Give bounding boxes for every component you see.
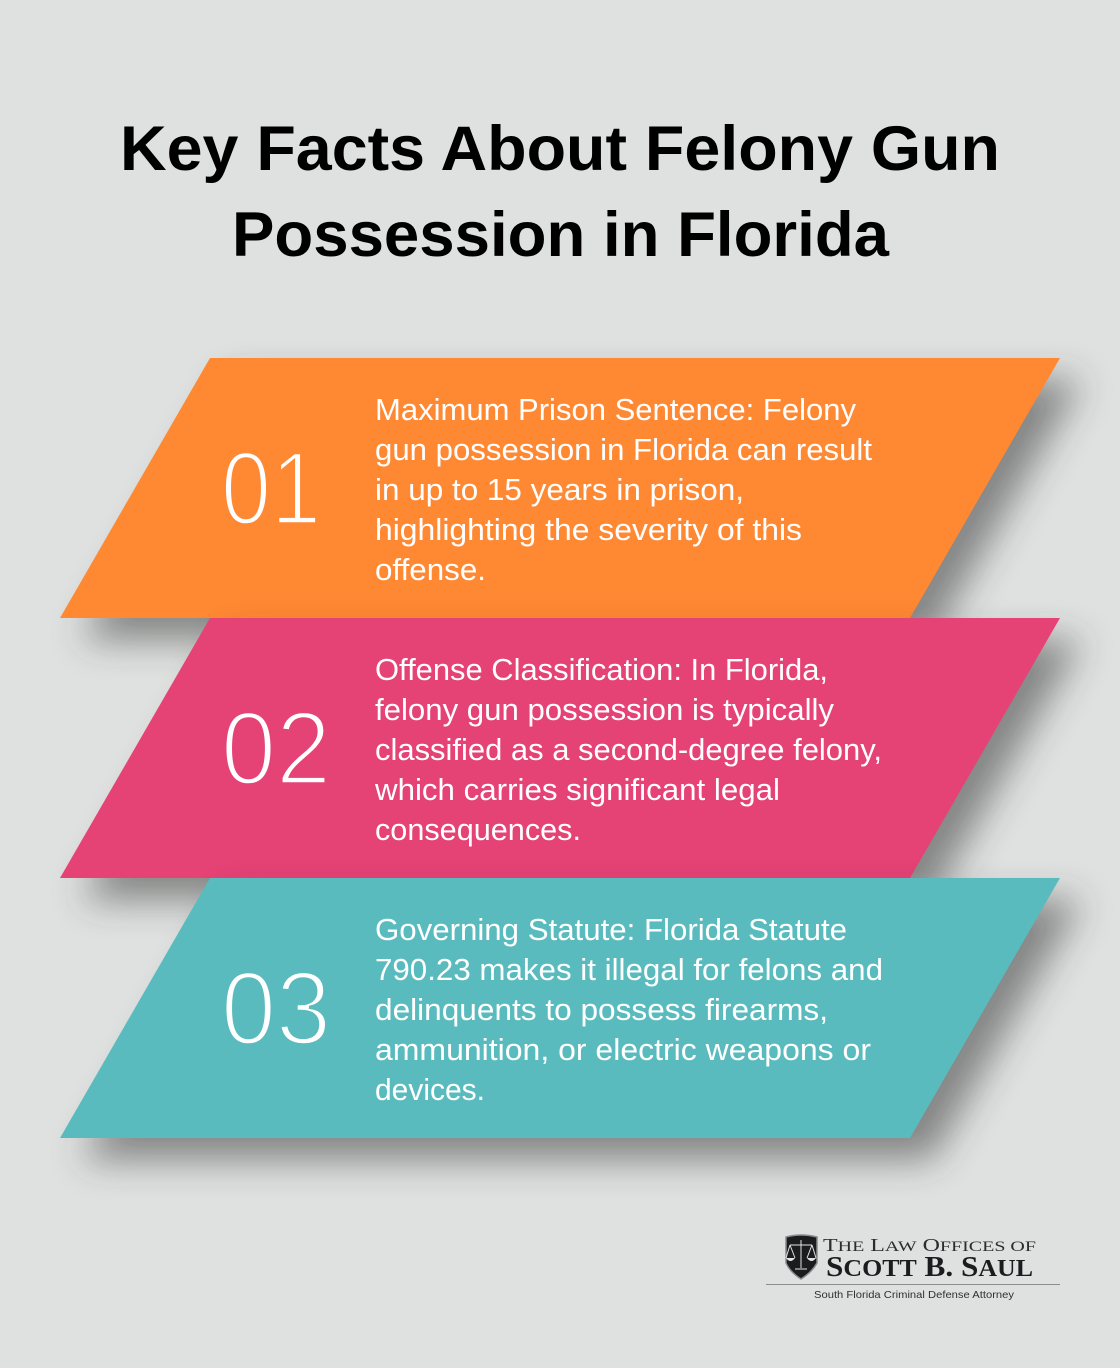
description 01: gun possession in Florida can result	[375, 432, 872, 467]
logo text line 2: SCOTT B. SAUL	[826, 1251, 1033, 1283]
logo text line 1: THE L AW O FFICES OF	[823, 1235, 1036, 1255]
panel: 02 offense classification	[60, 618, 1082, 900]
description 03: Governing Statute: Florida Statute	[375, 912, 847, 947]
number 03: 03	[221, 951, 331, 1067]
icon: shield with scales	[786, 1235, 817, 1279]
title	[120, 114, 1000, 270]
description 02: consequences.	[375, 812, 581, 847]
pink parallelogram	[60, 618, 1060, 878]
description 02: classified as a second-degree felony,	[375, 732, 882, 767]
description 02	[374, 652, 882, 847]
panel: 03 governing statute	[60, 878, 1082, 1160]
title: Possession in Florida	[232, 200, 890, 270]
description 03: 790.23 makes it illegal for felons and	[375, 952, 883, 987]
description 01: in up to 15 years in prison,	[375, 472, 744, 507]
description 01	[375, 392, 872, 587]
description 01: offense.	[375, 552, 486, 587]
panel: 01 maximum prison sentence	[60, 358, 1082, 640]
description 01: highlighting the severity of this	[375, 512, 802, 547]
teal parallelogram	[60, 878, 1060, 1138]
title: Key Facts About Felony Gun	[120, 114, 1000, 184]
description 03	[375, 912, 883, 1107]
number 02: 02	[221, 691, 331, 807]
logo: law offices of Scott B. Saul	[766, 1235, 1060, 1301]
logo tagline: South Florida Criminal Defense Attorney	[814, 1289, 1015, 1301]
description 03: devices.	[375, 1072, 485, 1107]
description 03: delinquents to possess firearms,	[375, 992, 828, 1027]
description 02: Offense Classification: In Florida,	[375, 652, 828, 687]
description 02: felony gun possession is typically	[375, 692, 834, 727]
number 01: 01	[221, 431, 321, 547]
description 02: which carries significant legal	[374, 772, 780, 807]
description 01: Maximum Prison Sentence: Felony	[375, 392, 856, 427]
orange parallelogram	[60, 358, 1060, 618]
description 03: ammunition, or electric weapons or	[375, 1032, 871, 1067]
